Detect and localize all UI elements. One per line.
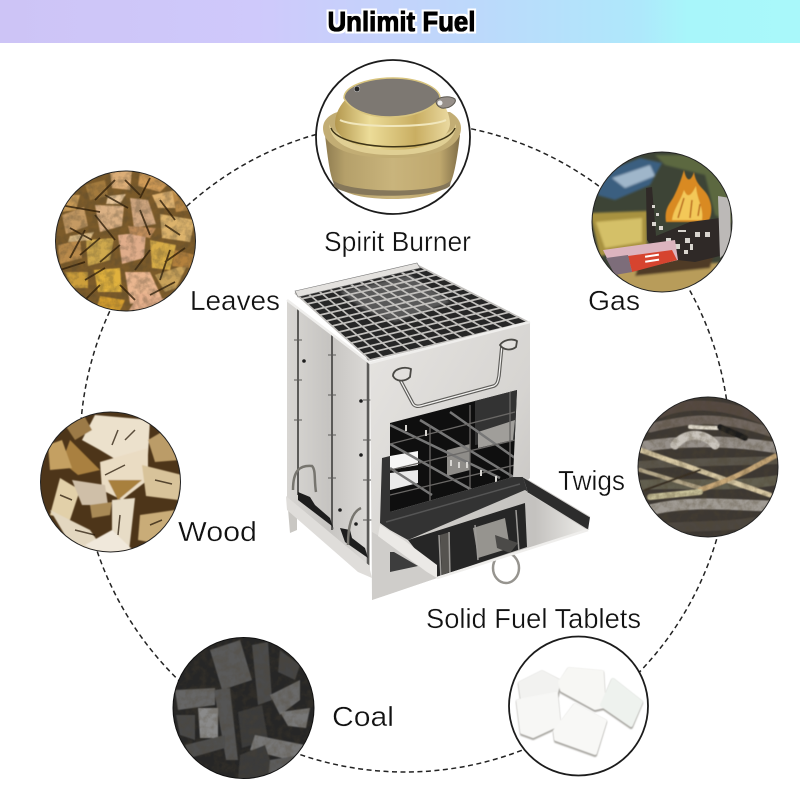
grill top rim xyxy=(287,300,530,363)
wire grill on the top xyxy=(287,263,530,363)
folded door tray xyxy=(372,456,590,600)
icon: tablet 1 xyxy=(520,672,559,697)
front handle xyxy=(393,340,517,406)
icon: sky and forest backdrop xyxy=(590,155,735,295)
lower front leg xyxy=(372,532,437,600)
left side of the stove xyxy=(287,300,370,567)
label: Twigs: Twigs xyxy=(558,465,625,496)
dashed ring connecting the fuels xyxy=(80,122,730,772)
stove side vent holes xyxy=(298,359,368,558)
header band xyxy=(0,0,800,43)
panel: twigs xyxy=(636,396,780,540)
icon: tablet 3 xyxy=(602,680,641,725)
label: Gas: Gas xyxy=(588,285,640,316)
icon: tablet 2 xyxy=(560,669,604,708)
leaf surface grain xyxy=(55,170,197,312)
front face of the stove xyxy=(370,322,530,600)
tray right rim xyxy=(523,477,590,530)
icon: gas canister box xyxy=(603,240,678,275)
icon: brass rim shadow xyxy=(331,128,455,147)
base strip xyxy=(286,496,372,578)
icon: inner brass crown xyxy=(335,100,450,150)
panel: stove xyxy=(286,263,590,600)
panel: leaves xyxy=(55,170,197,315)
coal surface grain xyxy=(172,636,316,780)
back feet xyxy=(287,497,320,533)
label: Solid Fuel Tablets: Solid Fuel Tablets xyxy=(426,603,641,634)
panel: coal xyxy=(172,636,316,780)
label: Coal: Coal xyxy=(332,701,394,732)
icon: grey lid xyxy=(344,78,440,117)
icon: cup base band xyxy=(333,180,451,196)
panel: wood xyxy=(40,411,182,560)
label: Wood: Wood xyxy=(178,516,257,547)
icon: lid tab xyxy=(436,97,455,108)
icon: outer brass cup xyxy=(325,135,460,199)
tablet shadows xyxy=(518,670,641,755)
front door opening with grate xyxy=(390,390,517,512)
tray left rim xyxy=(378,525,437,578)
icon: tablet 4 xyxy=(518,694,559,736)
icon: flames xyxy=(666,170,711,222)
twig bark grain xyxy=(639,416,776,514)
panel: solid fuel tablets xyxy=(509,636,648,776)
icon: outer ring xyxy=(323,112,461,158)
panel: gas xyxy=(590,150,735,295)
icon: perforated stove xyxy=(646,187,720,262)
side wire handles xyxy=(293,466,316,492)
tray lower edge xyxy=(437,530,588,578)
grill rolled back edge xyxy=(295,263,420,297)
label: Leaves: Leaves xyxy=(190,285,280,316)
label: Spirit Burner: Spirit Burner xyxy=(324,226,471,257)
title: Unlimit Fuel xyxy=(328,6,476,37)
icon: tablet 5 xyxy=(555,705,605,753)
tray ring pull xyxy=(493,553,519,583)
side panel hinges xyxy=(294,308,372,565)
panel: spirit burner xyxy=(316,60,470,214)
